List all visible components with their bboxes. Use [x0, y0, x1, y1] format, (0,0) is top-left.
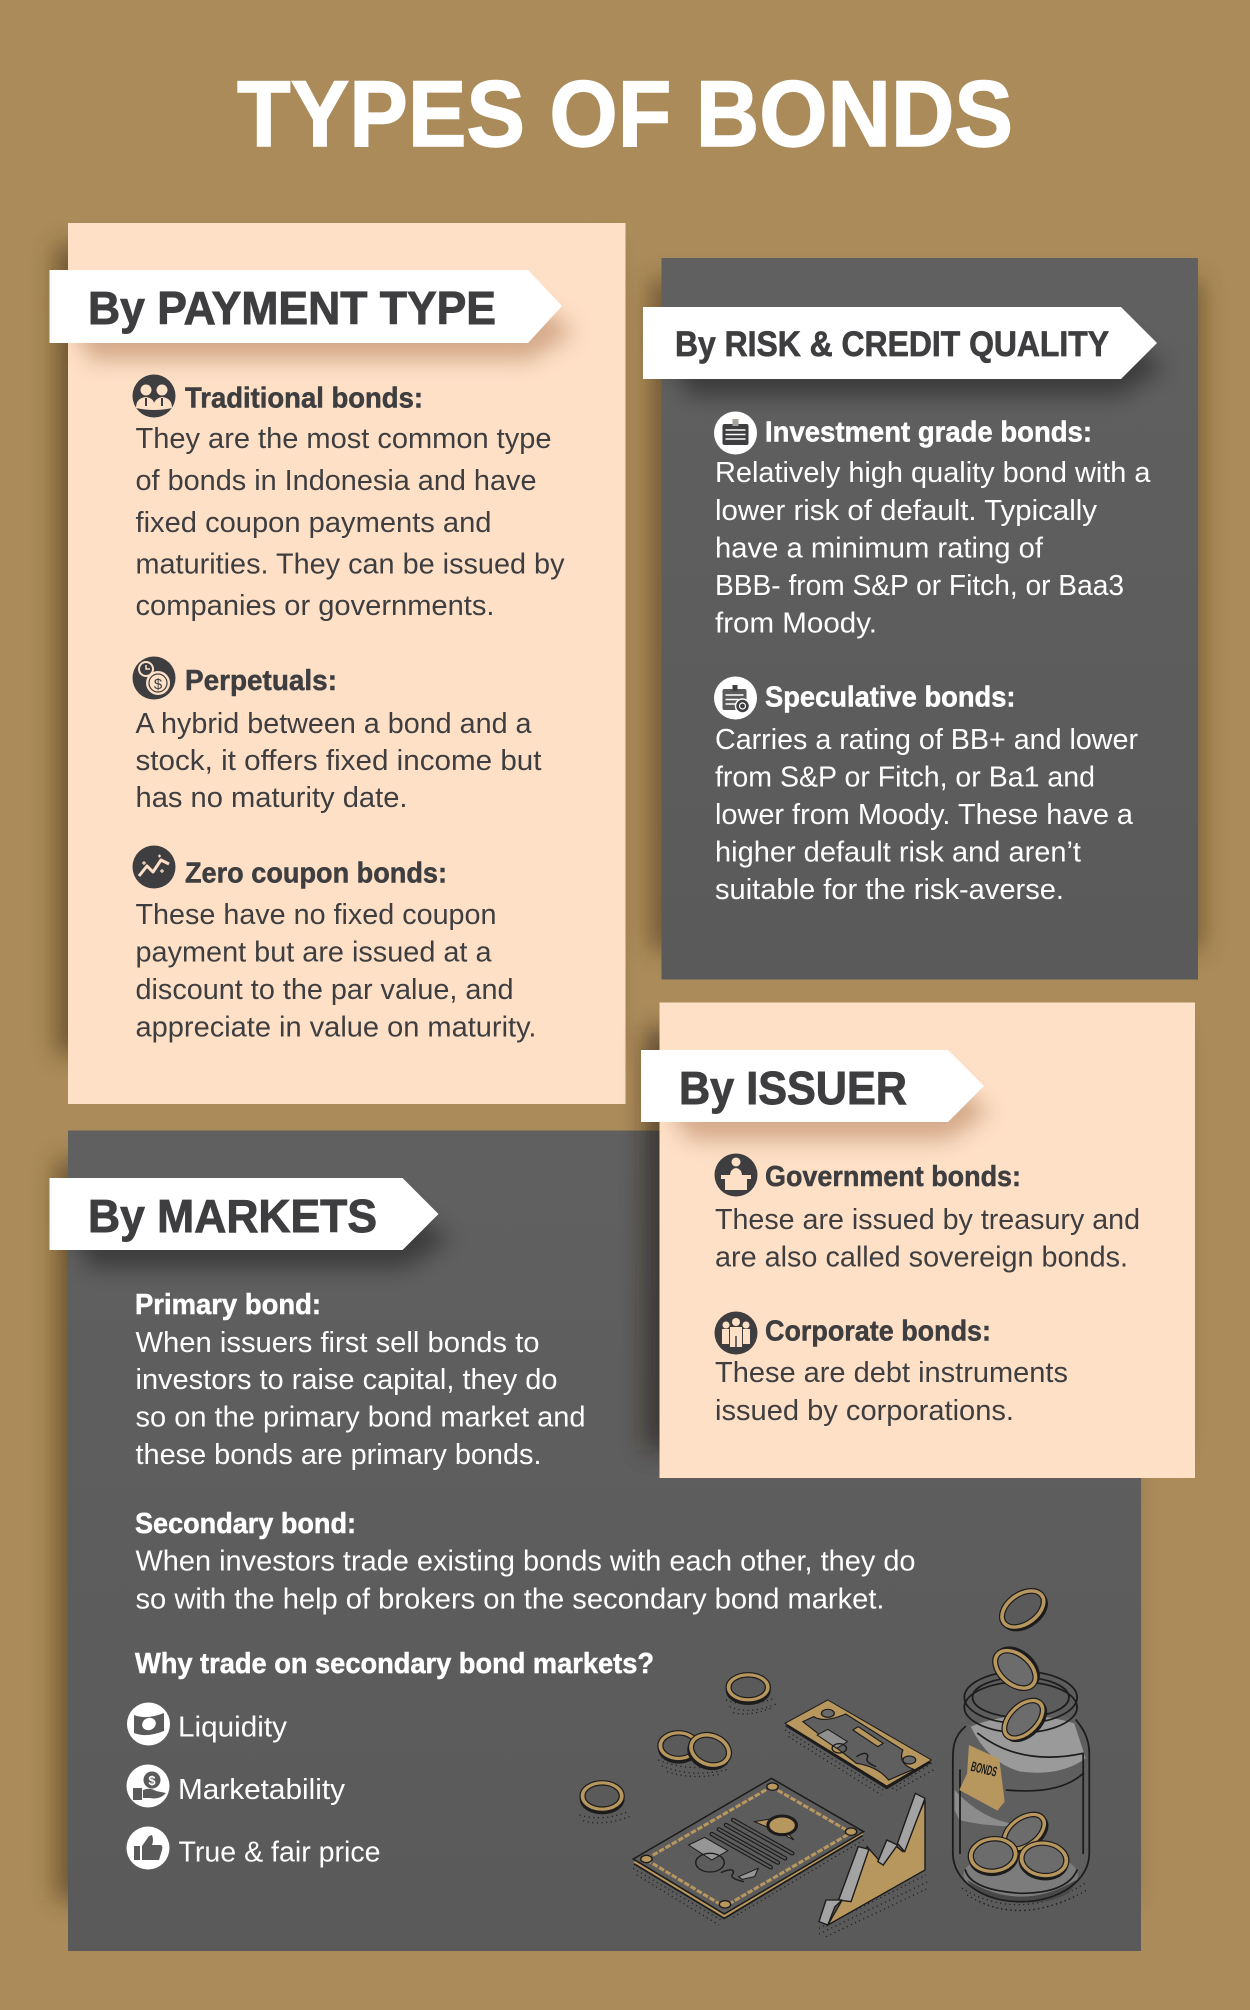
small bond certificate	[785, 1700, 931, 1789]
text: secondary bond	[135, 1508, 916, 1616]
text: speculative bonds: Carries a rating of BB+ and lower	[715, 724, 1139, 756]
text: speculative bonds: Speculative bonds:	[765, 682, 1016, 714]
text: traditional bonds: of bonds in Indonesia and have	[136, 465, 536, 497]
text: investment grade bonds: Relatively high quality bond with a	[715, 457, 1151, 489]
jar label: BONDS	[969, 1760, 999, 1780]
text: government bonds: Government bonds:	[765, 1161, 1021, 1193]
text: government bonds	[715, 1161, 1140, 1274]
text: primary bond: these bonds are primary bonds.	[136, 1439, 542, 1471]
text: government bonds: These are issued by treasury and	[715, 1204, 1140, 1236]
text: zero coupon bonds	[136, 858, 536, 1044]
text: perpetuals: has no maturity date.	[136, 782, 408, 814]
text: speculative bonds: suitable for the risk-averse.	[715, 874, 1064, 906]
banner: by risk and credit quality	[643, 307, 1157, 379]
panel: by risk and credit quality	[643, 258, 1202, 980]
banner: by payment type	[50, 270, 562, 343]
icon: hand with coin: $	[148, 1773, 156, 1788]
text: zero coupon bonds: discount to the par value, and	[136, 974, 514, 1006]
banner: by risk and credit quality: By RISK & CREDIT QUALITY	[675, 325, 1109, 364]
jar label	[959, 1745, 1005, 1811]
text: zero coupon bonds: These have no fixed coupon	[136, 899, 496, 931]
banner: by markets	[50, 1178, 438, 1250]
text: investment grade bonds: have a minimum rating of	[715, 532, 1043, 564]
text: traditional bonds: They are the most common type	[136, 423, 552, 455]
text: traditional bonds: companies or governments.	[136, 590, 494, 622]
icon: two business people	[132, 374, 176, 418]
banner: by payment type: By PAYMENT TYPE	[88, 282, 496, 334]
list item: liquidity: Liquidity	[178, 1712, 288, 1744]
text: corporate bonds: Corporate bonds:	[765, 1316, 991, 1348]
text: speculative bonds	[715, 682, 1139, 906]
banner: by markets: By MARKETS	[88, 1190, 377, 1242]
falling coins	[984, 1580, 1056, 1750]
banner: by issuer: By ISSUER	[679, 1062, 907, 1114]
text: zero coupon bonds: payment but are issued at a	[136, 936, 492, 968]
text: primary bond	[135, 1289, 586, 1471]
text: government bonds: are also called sovereign bonds.	[715, 1242, 1128, 1274]
text: primary bond: so on the primary bond market and	[136, 1402, 586, 1434]
icon: group of people	[714, 1312, 758, 1354]
rising chart	[819, 1793, 925, 1925]
icon: clipboard	[714, 412, 757, 454]
text: investment grade bonds: from Moody.	[715, 608, 877, 640]
flat coins	[580, 1673, 771, 1814]
jar	[953, 1671, 1089, 1903]
text: secondary bond: When investors trade existing bonds with each other, they do	[136, 1546, 916, 1578]
text: zero coupon bonds: appreciate in value on maturity.	[136, 1012, 536, 1044]
text: secondary bond: so with the help of brokers on the secondary bond market.	[136, 1584, 884, 1616]
text: perpetuals: stock, it offers fixed income but	[136, 745, 542, 777]
icon: hand with coin	[126, 1764, 170, 1808]
text: primary bond: Primary bond:	[135, 1289, 321, 1321]
text: speculative bonds: from S&P or Fitch, or Ba1 and	[715, 762, 1095, 794]
text: primary bond: When issuers first sell bonds to	[136, 1327, 540, 1359]
icon: clock and coin	[132, 656, 176, 700]
panel: by issuer	[641, 1002, 1195, 1478]
panel: by markets	[50, 1130, 1141, 1951]
text: speculative bonds: higher default risk and aren’t	[715, 836, 1081, 868]
heading: why trade on secondary bond markets: Why trade on secondary bond markets?	[135, 1648, 654, 1680]
icon: clock and coin: $	[154, 676, 163, 693]
text: perpetuals: A hybrid between a bond and a	[136, 708, 532, 740]
text: primary bond: investors to raise capital, they do	[136, 1364, 558, 1396]
icon: banknote	[127, 1702, 170, 1746]
text: investment grade bonds: lower risk of default. Typically	[715, 495, 1098, 527]
icon: zigzag growth chart	[132, 846, 176, 888]
text: corporate bonds: These are debt instruments	[715, 1357, 1068, 1389]
icon: clipboard with target	[714, 676, 757, 720]
text: investment grade bonds: BBB- from S&P or Fitch, or Baa3	[715, 570, 1124, 602]
text: investment grade bonds	[715, 416, 1151, 640]
banner: by issuer	[641, 1050, 984, 1122]
text: speculative bonds: lower from Moody. These have a	[715, 799, 1133, 831]
text: traditional bonds: maturities. They can be issued by	[136, 548, 565, 580]
illustration: bonds, coins and jar	[580, 1580, 1089, 1937]
text: perpetuals	[136, 665, 542, 814]
text: investment grade bonds: Investment grade bonds:	[765, 416, 1092, 448]
text: zero coupon bonds: Zero coupon bonds:	[185, 858, 447, 890]
icon: thumbs up	[126, 1826, 170, 1870]
list item: marketability: Marketability	[178, 1774, 346, 1806]
large bond certificate	[633, 1778, 864, 1919]
title: TYPES OF BONDS	[237, 61, 1013, 166]
text: perpetuals: Perpetuals:	[185, 665, 337, 697]
panel: by payment type	[50, 223, 626, 1104]
text: corporate bonds	[715, 1316, 1068, 1427]
text: secondary bond: Secondary bond:	[135, 1508, 356, 1540]
text: traditional bonds	[136, 382, 565, 622]
text: traditional bonds: fixed coupon payments and	[136, 507, 492, 539]
list item: true and fair price: True & fair price	[178, 1836, 380, 1868]
coins inside jar	[966, 1804, 1071, 1883]
text: traditional bonds: Traditional bonds:	[185, 382, 423, 414]
icon: speaker at podium	[714, 1154, 758, 1196]
text: corporate bonds: issued by corporations.	[715, 1395, 1014, 1427]
dotted shadows	[580, 1698, 1087, 1937]
